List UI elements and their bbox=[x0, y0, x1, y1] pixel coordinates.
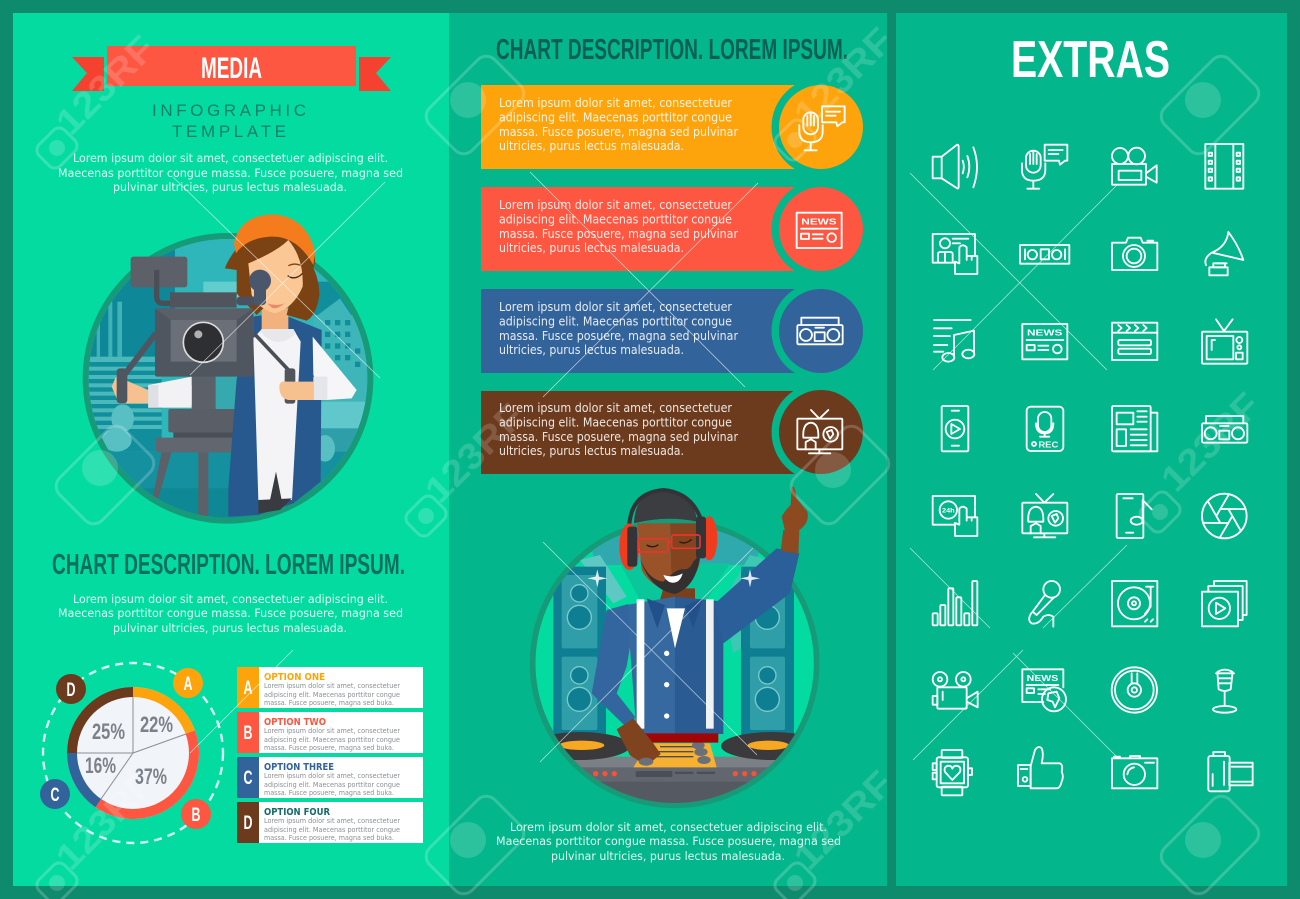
heading: extras: EXTRAS bbox=[1011, 31, 1170, 89]
icon: gramophone bbox=[1205, 232, 1243, 275]
man bbox=[592, 486, 808, 766]
badge B bbox=[181, 799, 211, 829]
icon: phone music bbox=[1117, 494, 1152, 538]
step 3 blue bbox=[481, 273, 870, 391]
bottom text bbox=[496, 820, 841, 863]
step 3 blue: Lorem ipsum dolor sit amet, consectetuer bbox=[499, 300, 732, 314]
icon: id card touch bbox=[933, 234, 977, 274]
option four bbox=[237, 802, 423, 843]
chart description text: Maecenas porttitor congue massa. Fusce posuere, magna sed bbox=[58, 606, 403, 620]
option two: adipiscing elit. Maecenas porttitor congue bbox=[264, 736, 400, 744]
sparkles bbox=[587, 569, 760, 587]
icon: news: NEWS bbox=[1027, 328, 1063, 338]
option four: Lorem ipsum dolor sit amet, consectetuer bbox=[264, 817, 400, 825]
step 2 red bbox=[481, 171, 870, 289]
icon: 24h touch: 24h bbox=[942, 508, 955, 514]
chart description text: pulvinar ultricies, purus lectus malesuada. bbox=[113, 621, 347, 635]
intro text bbox=[58, 151, 403, 194]
icon rows 7-8 bbox=[933, 667, 1253, 795]
watermark overlay: 123RF bbox=[417, 395, 532, 511]
pie chart bbox=[40, 663, 223, 843]
icon: tv bbox=[1202, 319, 1247, 364]
icon: clapperboard bbox=[1112, 323, 1157, 360]
icon: speaker bbox=[933, 145, 977, 188]
option four: D bbox=[244, 813, 252, 834]
badge B: B bbox=[192, 805, 200, 826]
badge A: A bbox=[184, 674, 193, 695]
icon: news bbox=[1022, 324, 1067, 359]
illustration: DJ bbox=[520, 486, 830, 810]
step 4 brown: Lorem ipsum dolor sit amet, consectetuer bbox=[499, 401, 732, 415]
badge A bbox=[173, 668, 203, 698]
DJ deck bbox=[554, 732, 796, 803]
icon: bar chart bbox=[933, 581, 977, 625]
watermark overlay: 123RF bbox=[786, 762, 901, 878]
badge D: D bbox=[66, 680, 76, 701]
icon: tv presenter bbox=[797, 410, 842, 453]
intro text: Maecenas porttitor congue massa. Fusce posuere, magna sed bbox=[58, 166, 403, 180]
step 4 brown bbox=[481, 375, 870, 488]
step 2 red: adipiscing elit. Maecenas porttitor congue bbox=[499, 212, 732, 226]
step 2 red: Lorem ipsum dolor sit amet, consectetuer bbox=[499, 198, 732, 212]
watermark overlay: 123RF bbox=[48, 762, 163, 878]
option one: Lorem ipsum dolor sit amet, consectetuer bbox=[264, 682, 400, 690]
title ribbon bbox=[72, 46, 391, 91]
icon: video stack bbox=[1202, 581, 1247, 626]
icon: boombox bbox=[1202, 416, 1247, 443]
tripod bbox=[153, 376, 234, 516]
panel: left bbox=[13, 13, 449, 886]
pie chart: 37% bbox=[135, 764, 167, 789]
step 1 orange: adipiscing elit. Maecenas porttitor congue bbox=[499, 110, 732, 124]
icon: film strip bbox=[1205, 144, 1243, 189]
icon: newspaper bbox=[1112, 406, 1157, 451]
option two: B bbox=[244, 723, 252, 744]
icon: 24h touch bbox=[933, 496, 977, 536]
option three: massa. Fusce posuere, magna sed buka. bbox=[264, 789, 394, 797]
subtitle bbox=[152, 101, 306, 141]
icon: world news: NEWS bbox=[1027, 673, 1059, 683]
step 4 brown: adipiscing elit. Maecenas porttitor congue bbox=[499, 416, 732, 430]
icon: music list bbox=[934, 320, 974, 362]
badge D bbox=[56, 674, 86, 704]
watermark overlay: 123RF bbox=[48, 27, 163, 143]
title ribbon: MEDIA bbox=[201, 52, 262, 85]
step 2 red: massa. Fusce posuere, magna sed pulvinar bbox=[499, 227, 738, 241]
bottom text: pulvinar ultricies, purus lectus malesuada. bbox=[551, 849, 785, 863]
pie chart: 16% bbox=[85, 753, 116, 778]
subtitle: INFOGRAPHIC bbox=[152, 101, 306, 120]
heading: chart description left: CHART DESCRIPTION. LOREM IPSUM. bbox=[52, 549, 405, 581]
icon: video camera bbox=[1112, 148, 1157, 185]
pie chart: 22% bbox=[140, 712, 173, 737]
icon: boombox bbox=[797, 318, 843, 344]
step 3 blue: adipiscing elit. Maecenas porttitor congue bbox=[499, 314, 732, 328]
option two: massa. Fusce posuere, magna sed buka. bbox=[264, 744, 394, 752]
icon: turntable bbox=[1112, 581, 1157, 626]
icon rows 4-6 bbox=[933, 406, 1247, 627]
panel: middle bbox=[449, 13, 887, 886]
bottom text: Maecenas porttitor congue massa. Fusce posuere, magna sed bbox=[496, 834, 841, 848]
icon: thumbs up bbox=[1018, 747, 1063, 788]
option one: massa. Fusce posuere, magna sed buka. bbox=[264, 699, 394, 707]
option three: adipiscing elit. Maecenas porttitor congue bbox=[264, 781, 400, 789]
icon: receiver bbox=[1020, 245, 1069, 264]
bottom text: Lorem ipsum dolor sit amet, consectetuer adipiscing elit. bbox=[510, 820, 827, 834]
step 1 orange: massa. Fusce posuere, magna sed pulvinar bbox=[499, 125, 738, 139]
watermark overlay: 123RF bbox=[1153, 384, 1268, 500]
step 3 blue: massa. Fusce posuere, magna sed pulvinar bbox=[499, 329, 738, 343]
icon: phone video bbox=[942, 406, 968, 451]
icon: disc bbox=[1112, 667, 1157, 713]
head bbox=[637, 523, 672, 592]
option four: OPTION FOUR bbox=[264, 807, 331, 818]
illustration: camerawoman bbox=[80, 214, 380, 528]
option two bbox=[237, 712, 423, 753]
icon: rec: REC bbox=[1038, 440, 1059, 449]
icon: compact camera bbox=[1112, 756, 1157, 788]
icon: aperture bbox=[1202, 494, 1247, 538]
step 4 brown: ultricies, purus lectus malesuada. bbox=[499, 444, 684, 458]
option one: A bbox=[244, 678, 253, 699]
step 1 orange: Lorem ipsum dolor sit amet, consectetuer bbox=[499, 96, 732, 110]
step 2 red: ultricies, purus lectus malesuada. bbox=[499, 241, 684, 255]
panel: extras bbox=[896, 13, 1287, 886]
step 1 orange bbox=[481, 60, 870, 189]
option three: Lorem ipsum dolor sit amet, consectetuer bbox=[264, 772, 400, 780]
icon: film roll bbox=[1208, 752, 1253, 791]
icon: cine camera bbox=[933, 672, 978, 709]
heading: chart description middle: CHART DESCRIPTION. LOREM IPSUM. bbox=[496, 34, 848, 66]
icon: microphone bbox=[799, 106, 845, 150]
icon: news: NEWS bbox=[801, 216, 837, 226]
badge C: C bbox=[50, 785, 60, 806]
option four: massa. Fusce posuere, magna sed buka. bbox=[264, 834, 394, 842]
watermark overlay: 123RF bbox=[786, 19, 901, 135]
icon: retro mic bbox=[1213, 670, 1236, 713]
option one bbox=[237, 667, 423, 708]
intro text: pulvinar ultricies, purus lectus malesuada. bbox=[113, 180, 347, 194]
badge C bbox=[40, 779, 70, 809]
icon: news bbox=[797, 213, 842, 248]
icon: world news bbox=[1022, 669, 1066, 711]
option two: Lorem ipsum dolor sit amet, consectetuer bbox=[264, 727, 400, 735]
option three: OPTION THREE bbox=[264, 762, 334, 773]
option one: adipiscing elit. Maecenas porttitor congue bbox=[264, 691, 400, 699]
pie chart: 25% bbox=[92, 719, 125, 744]
video camera bbox=[112, 257, 271, 408]
option four: adipiscing elit. Maecenas porttitor congue bbox=[264, 826, 400, 834]
option one: OPTION ONE bbox=[264, 672, 325, 683]
option three bbox=[237, 757, 423, 798]
icon rows 1-3 bbox=[933, 144, 1247, 364]
woman bbox=[225, 214, 357, 517]
step 3 blue: ultricies, purus lectus malesuada. bbox=[499, 343, 684, 357]
subtitle: TEMPLATE bbox=[172, 122, 286, 141]
icon: photo camera bbox=[1112, 238, 1157, 270]
icon: smartwatch bbox=[933, 750, 972, 795]
step 4 brown: massa. Fusce posuere, magna sed pulvinar bbox=[499, 430, 738, 444]
option three: C bbox=[244, 768, 253, 789]
speakers bbox=[553, 567, 794, 737]
icon: karaoke mic bbox=[1029, 581, 1060, 627]
icon: tv presenter bbox=[1022, 494, 1067, 537]
icon: microphone with bubble bbox=[1022, 145, 1067, 189]
chart description text bbox=[58, 592, 403, 635]
chart description text: Lorem ipsum dolor sit amet, consectetuer adipiscing elit. bbox=[73, 592, 388, 606]
intro text: Lorem ipsum dolor sit amet, consectetuer adipiscing elit. bbox=[73, 151, 388, 165]
step 1 orange: ultricies, purus lectus malesuada. bbox=[499, 139, 684, 153]
icon: rec bbox=[1027, 407, 1063, 451]
option two: OPTION TWO bbox=[264, 717, 326, 728]
